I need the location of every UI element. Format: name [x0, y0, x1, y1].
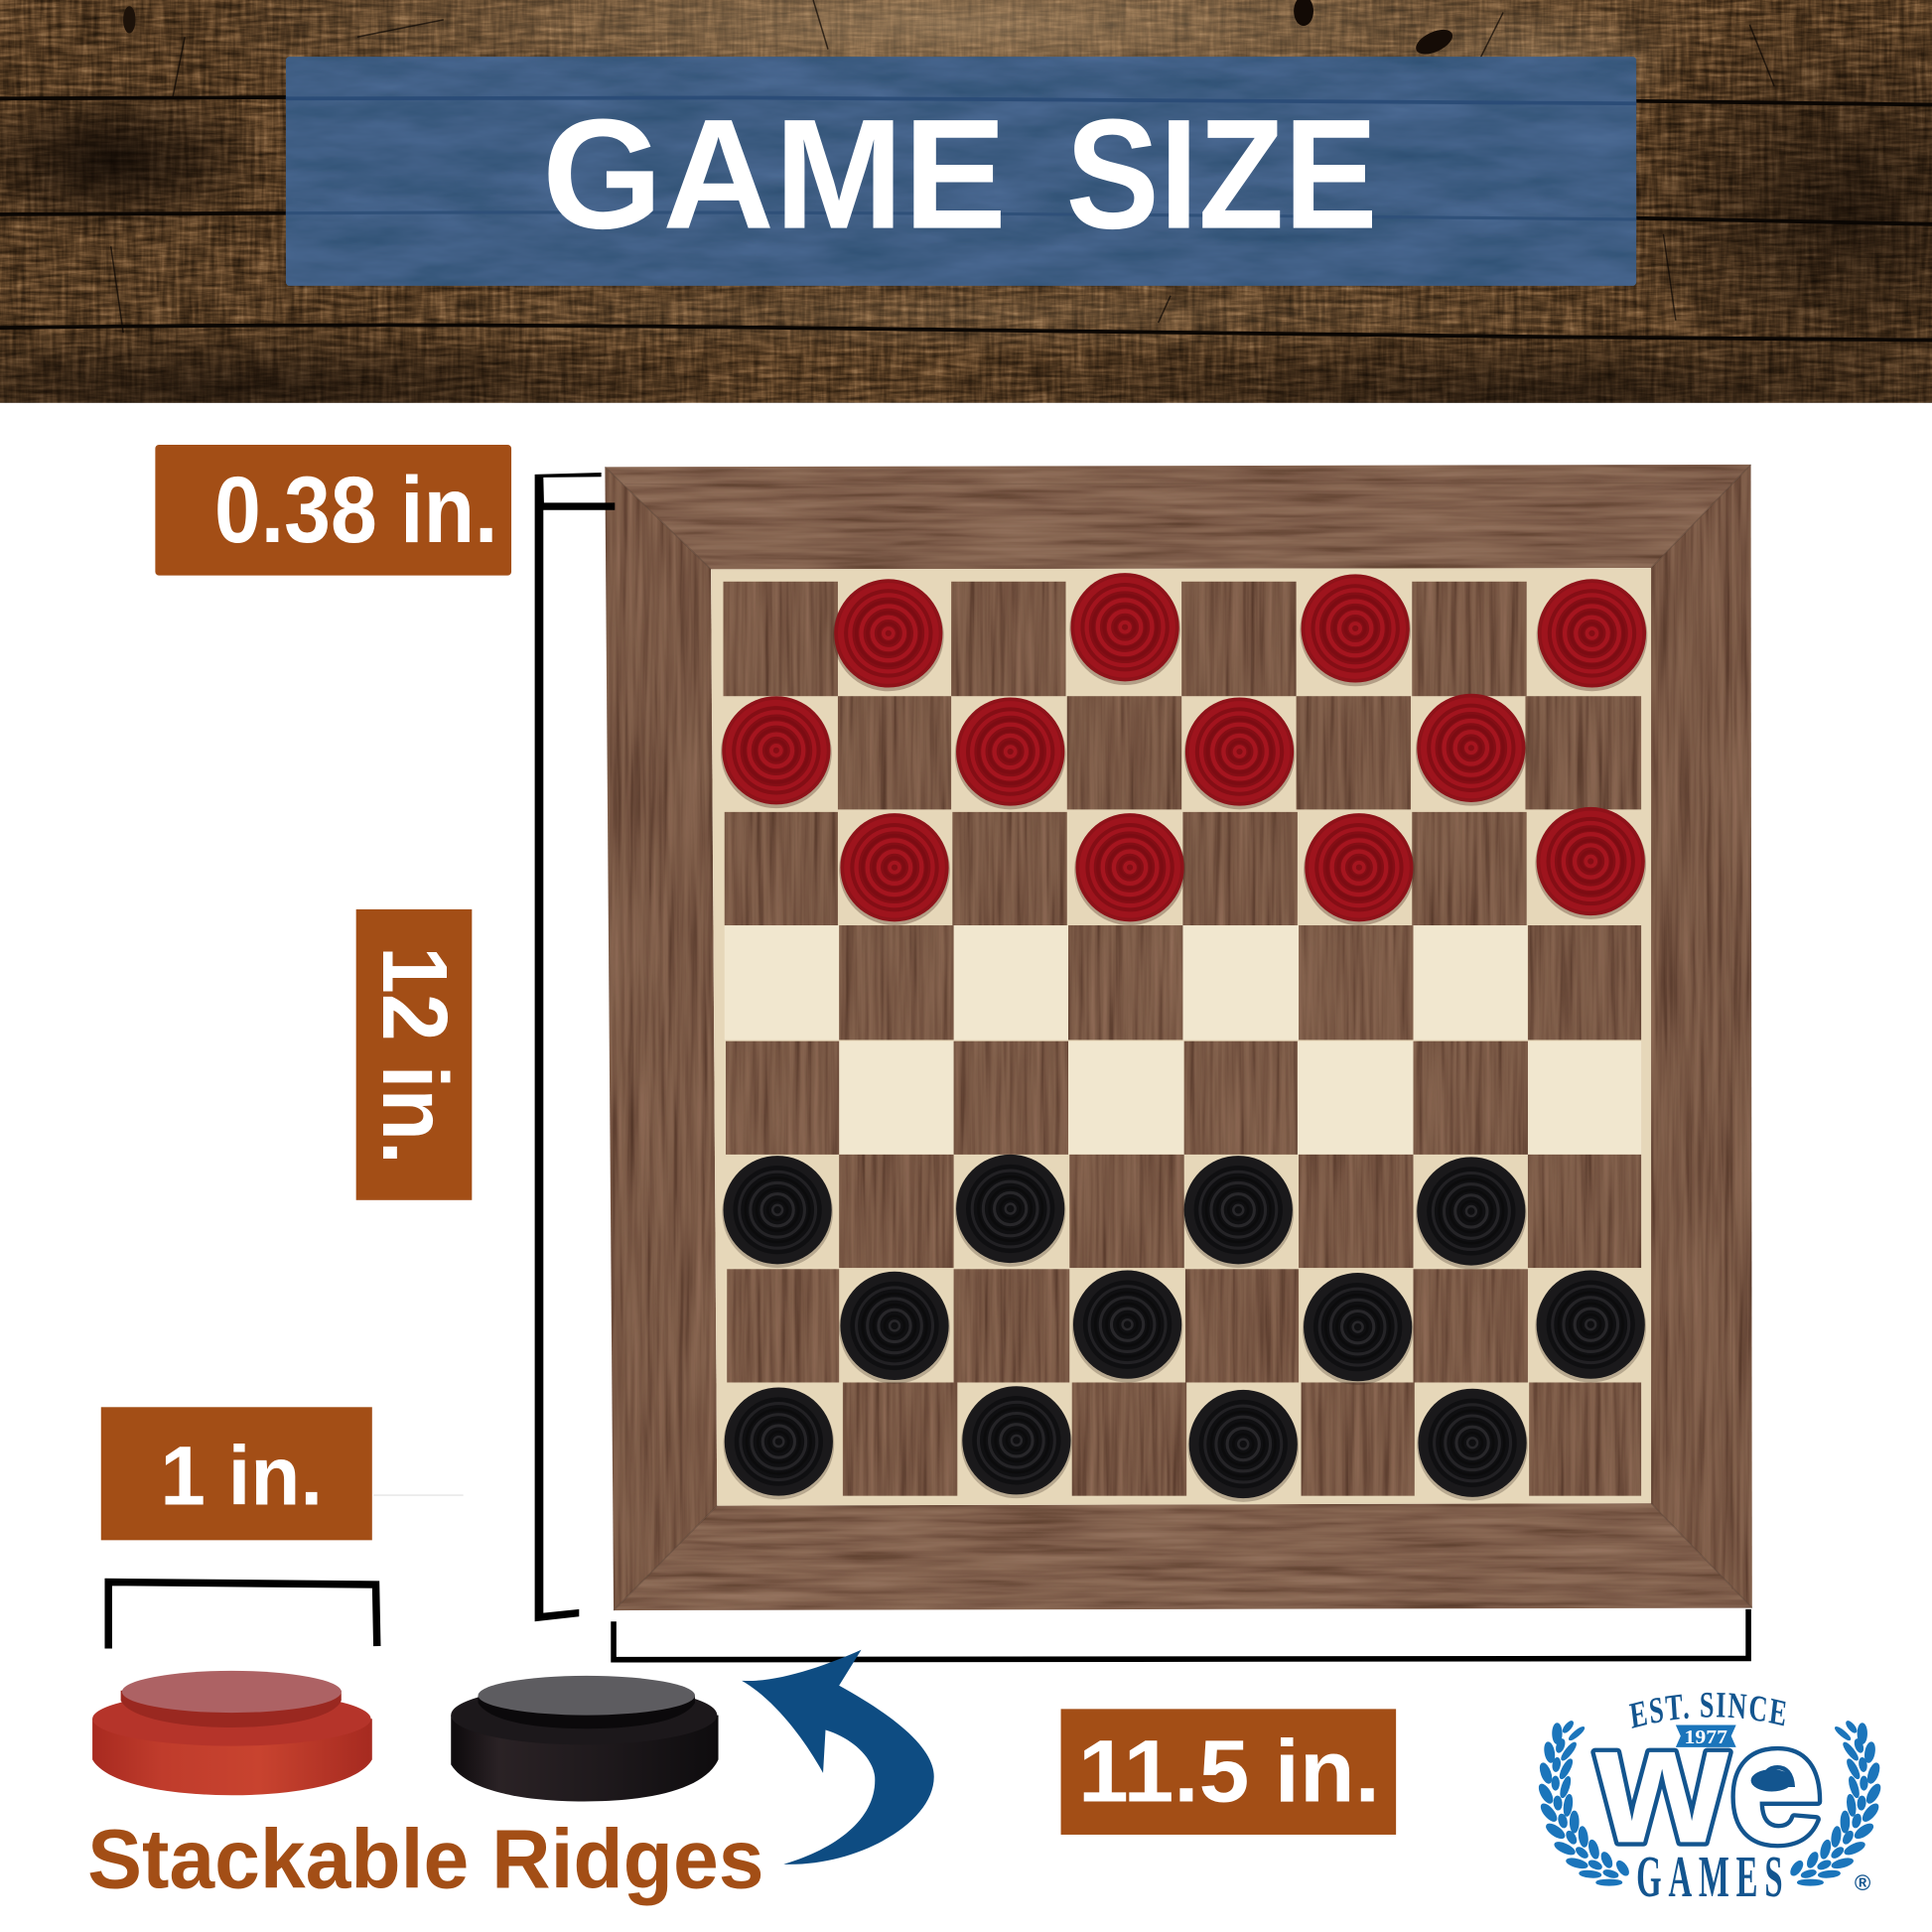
black checker — [722, 1156, 833, 1268]
board frame: side rails — [605, 465, 1752, 1610]
caption: stackable ridges: Stackable Ridges — [87, 1812, 763, 1905]
logo games text: GAMES — [1636, 1845, 1789, 1910]
label: 0.38 in. — [155, 445, 511, 576]
red checker — [1537, 579, 1647, 691]
red checker — [1069, 573, 1180, 685]
black checker — [724, 1387, 834, 1499]
black checker — [1535, 1271, 1646, 1382]
red checker — [955, 697, 1066, 809]
red checker — [1074, 813, 1185, 925]
red checker — [721, 696, 832, 808]
black checker — [1417, 1389, 1528, 1501]
red checker side view — [92, 1671, 372, 1795]
logo we wordmark: we — [1594, 1689, 1824, 1878]
black checker — [1187, 1390, 1299, 1502]
light centre squares — [725, 925, 1641, 1155]
logo laurel left — [1537, 1721, 1630, 1885]
black checker — [1182, 1156, 1294, 1268]
logo registered mark: ® — [1855, 1870, 1871, 1895]
dimension bracket: checker diameter — [108, 1583, 377, 1649]
label: 1 in.: 1 in. — [160, 1429, 323, 1522]
red checker — [1304, 813, 1415, 925]
logo laurel right — [1789, 1721, 1882, 1885]
label: 12 in.: 12 in. — [363, 946, 467, 1165]
title text: SIZE — [1066, 87, 1378, 262]
logo: WE Games — [1539, 1689, 1880, 1910]
black checker — [1303, 1273, 1414, 1385]
dimension bracket: board width — [614, 1609, 1748, 1660]
checkerboard — [605, 465, 1752, 1610]
black checker — [839, 1272, 950, 1384]
label: 11.5 in. — [1061, 1709, 1396, 1835]
logo 1977 ribbon — [1676, 1725, 1736, 1748]
black checker — [1416, 1157, 1527, 1269]
red checker — [1184, 697, 1295, 809]
red checker — [1535, 807, 1646, 919]
black checker — [1072, 1271, 1182, 1382]
red checker — [1300, 574, 1411, 686]
label: 0.38 in.: 0.38 in. — [214, 458, 497, 562]
label: 1 in. — [101, 1407, 372, 1540]
red checker — [839, 813, 950, 925]
logo est since text: EST. SINCE — [1628, 1692, 1785, 1728]
red checker — [1416, 694, 1527, 806]
black checker — [961, 1386, 1072, 1498]
dark squares — [724, 582, 1641, 1496]
black checker — [955, 1155, 1066, 1267]
red checker — [833, 579, 944, 691]
curved arrow — [742, 1650, 934, 1864]
logo 1977 ribbon: 1977 — [1685, 1726, 1727, 1748]
label: 11.5 in.: 11.5 in. — [1078, 1721, 1380, 1820]
black checker side view — [451, 1676, 719, 1801]
title text: GAME — [542, 87, 1007, 262]
wood header background — [0, 0, 1932, 403]
board frame: top and bottom rails — [605, 465, 1752, 1610]
dimension bracket: frame thickness and height — [535, 473, 615, 1621]
title banner — [286, 57, 1636, 286]
ivory playing field — [711, 568, 1651, 1506]
